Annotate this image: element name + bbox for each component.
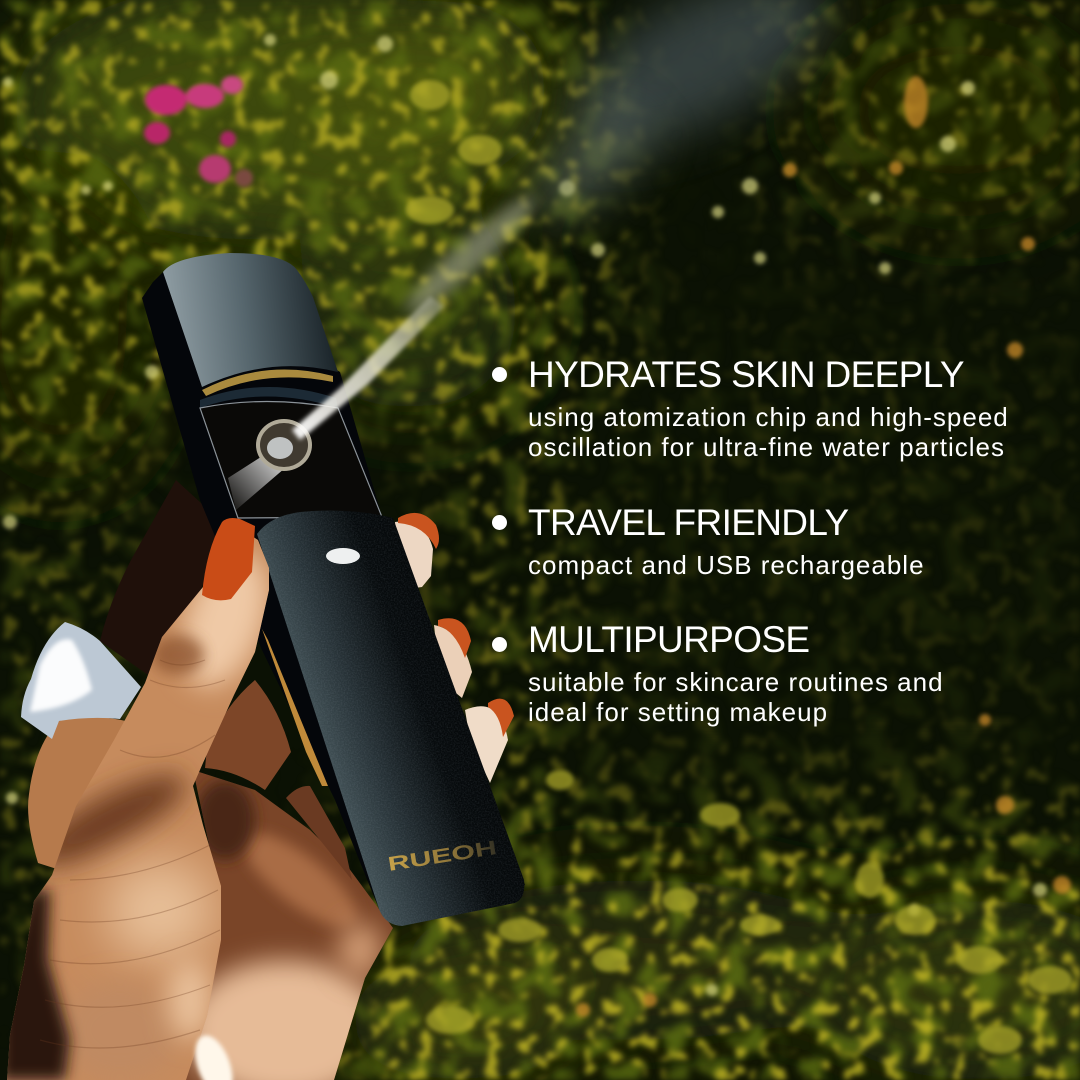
device body [257,510,524,926]
fingertips behind device [395,513,514,783]
nozzle [256,419,312,471]
body grain [250,505,530,930]
blue frame strip [200,387,338,408]
light ray inside window [228,448,292,510]
mist spray beam [292,296,445,440]
description [528,402,1009,462]
gold trim [202,370,333,396]
heading: HYDRATES SKIN DEEPLY [528,354,964,395]
heading: MULTIPURPOSE [528,619,809,660]
text block: travel friendly [492,502,925,580]
device frame [142,270,525,926]
mid finger segment behind device [286,786,352,880]
description: suitable for skincare routines and [528,667,944,697]
ring finger segment [205,680,291,790]
hand: dark back of hand behind device [100,480,225,675]
skin creases [40,660,225,1048]
nozzle window [200,402,382,518]
description: oscillation for ultra-fine water particles [528,432,1005,462]
mist device [142,253,530,930]
description: using atomization chip and high-speed [528,402,1009,432]
bullet [492,515,507,530]
text block: hydrates skin deeply [492,354,1009,462]
mist spray haze [397,0,852,323]
sun highlight on palm [188,1030,240,1080]
metal stand [21,622,141,739]
text block: multipurpose [492,619,944,727]
index finger behind the metal stand [28,717,130,870]
description: ideal for setting makeup [528,697,828,727]
thumbnail [202,518,255,600]
description: compact and USB rechargeable [528,550,925,580]
heading: TRAVEL FRIENDLY [528,502,849,543]
palm and lower fingers [186,772,393,1080]
indicator light [326,548,360,564]
gold side line [262,629,328,786]
hand: thumb [7,538,269,1080]
bullet [492,367,507,382]
description [528,667,944,727]
device cap [163,253,338,387]
background: pink flowers [144,76,253,187]
bullet [492,637,507,652]
brand logo: RUEOH [386,837,498,876]
